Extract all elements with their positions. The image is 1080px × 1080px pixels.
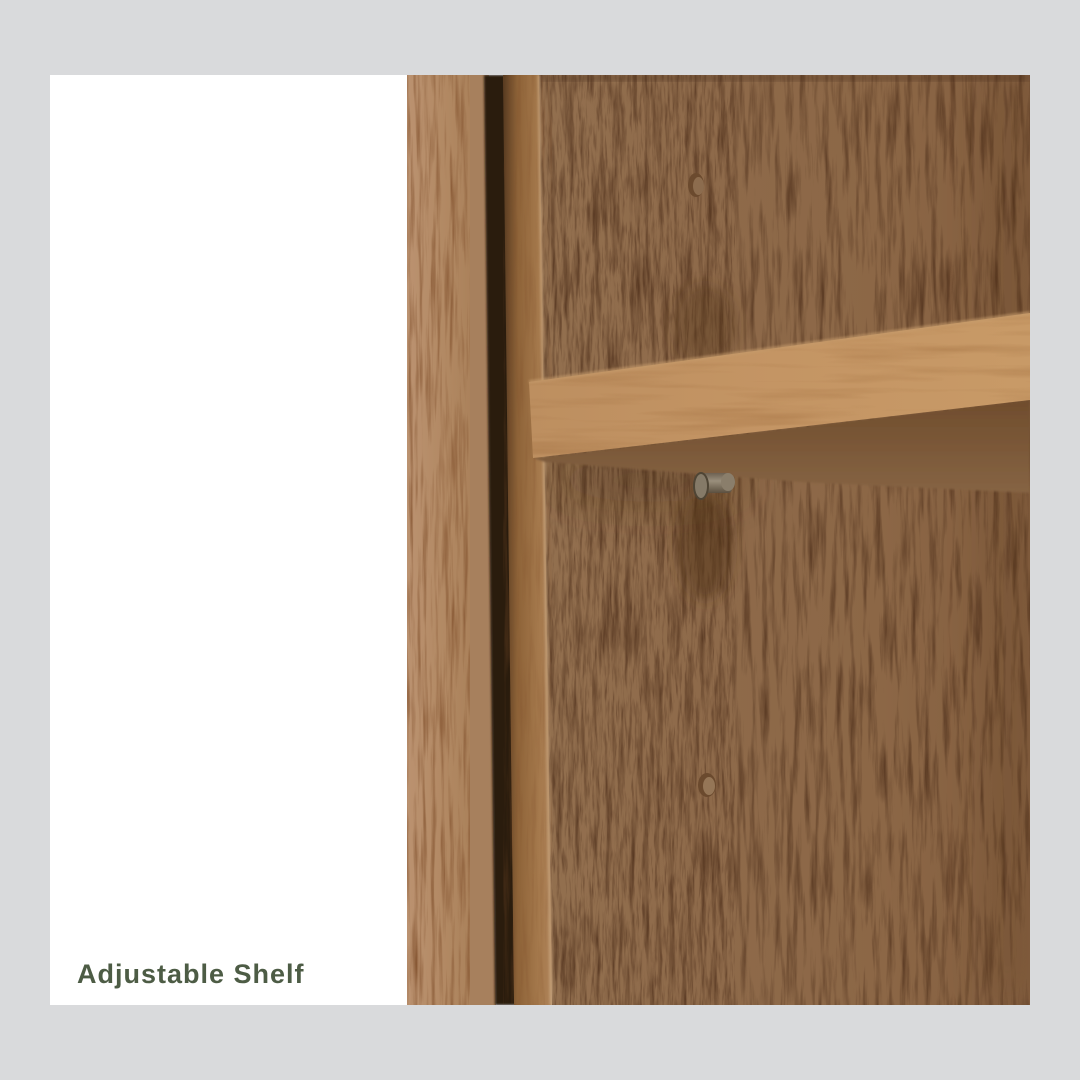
caption: Adjustable Shelf: Adjustable Shelf bbox=[77, 959, 305, 989]
panel: white caption card bbox=[50, 75, 407, 1005]
dark gap bbox=[484, 75, 518, 1005]
shelf hole: lower bbox=[698, 773, 716, 797]
left post bbox=[407, 75, 496, 1005]
shelf front edge bbox=[529, 311, 1030, 458]
shelf hole: upper bbox=[688, 173, 704, 197]
shelf underside bbox=[533, 400, 1030, 493]
photo: wooden cabinet interior with adjustable shelf bbox=[407, 75, 1030, 1005]
side frame bbox=[503, 75, 552, 1005]
shelf pin bbox=[694, 473, 735, 499]
back panel bbox=[535, 75, 1030, 1005]
